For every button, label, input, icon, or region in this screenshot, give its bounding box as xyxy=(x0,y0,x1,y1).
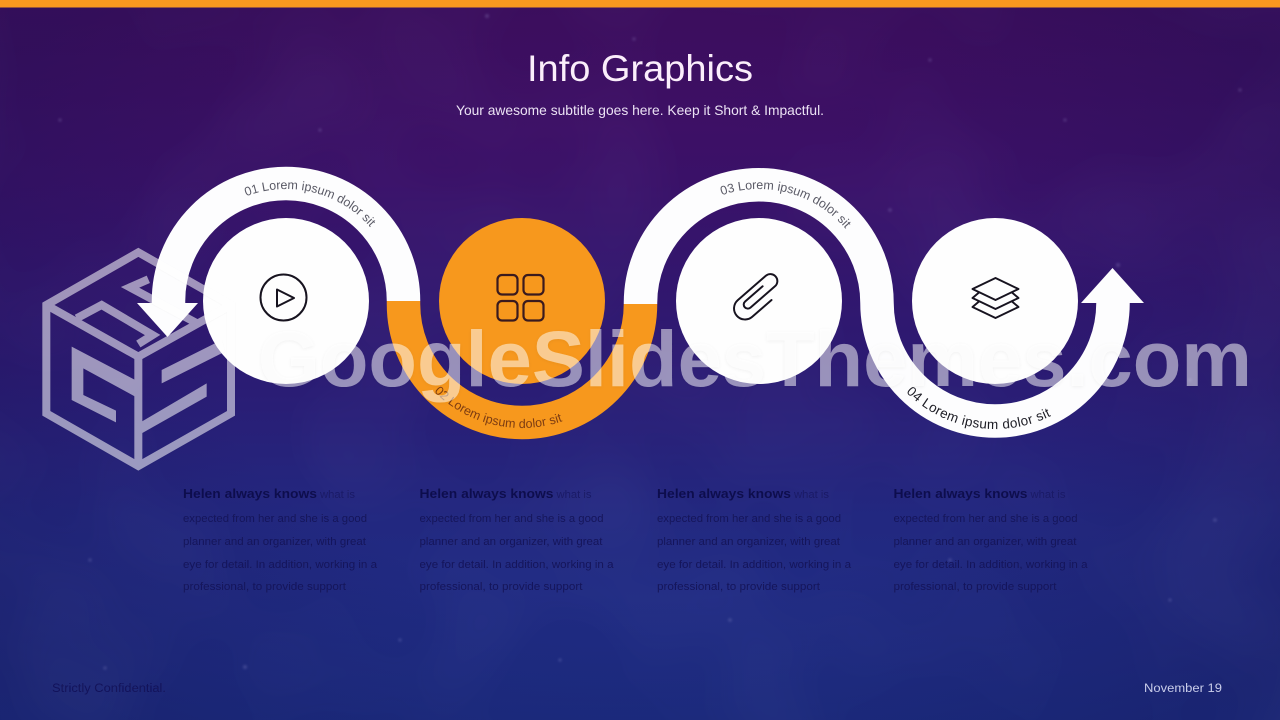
footer: confidentiality note: Strictly Confidential. xyxy=(52,683,166,695)
text block 3: professional, to provide support xyxy=(657,581,820,593)
text block 4 xyxy=(894,487,1088,593)
text block 2: eye for detail. In addition, working in a xyxy=(420,559,614,571)
footer: date: November 19 xyxy=(1144,683,1222,695)
text block 3: eye for detail. In addition, working in a xyxy=(657,559,852,571)
icon: play xyxy=(260,274,306,320)
subtitle: Your awesome subtitle goes here. Keep it Short & Impactful. xyxy=(456,102,824,118)
text block 2 xyxy=(420,487,614,593)
title: Info Graphics xyxy=(527,48,753,89)
label 04: 04 Lorem ipsum dolor sit xyxy=(908,387,1051,430)
text block 4: planner and an organizer, with great xyxy=(894,536,1076,548)
text block 4: expected from her and she is a good xyxy=(894,513,1078,525)
watermark text: GoogleSlidesThemes.com xyxy=(258,314,1252,403)
arrow segment 01: white ribbon with arrowhead xyxy=(137,166,420,337)
icon: paperclip xyxy=(729,271,786,324)
arrow segments 03 and 04: white S ribbon with arrowhead xyxy=(624,168,1144,438)
step 1 circle with play icon xyxy=(203,218,369,384)
arrow segment 02: orange ribbon xyxy=(386,301,658,440)
text block 4: Helen always knows xyxy=(894,487,1028,501)
text block 3: planner and an organizer, with great xyxy=(657,536,840,548)
text block 1 xyxy=(183,487,378,593)
step 4 circle with layers icon xyxy=(912,218,1078,384)
text block 2: planner and an organizer, with great xyxy=(420,536,602,548)
text block 1: what is xyxy=(319,489,355,501)
text block 4: what is xyxy=(1029,489,1066,501)
text block 3 xyxy=(657,487,852,593)
text block 4: eye for detail. In addition, working in a xyxy=(894,559,1088,571)
watermark logo: cube xyxy=(46,252,231,466)
text block 2: Helen always knows xyxy=(420,487,554,501)
text block 1: Helen always knows xyxy=(183,487,317,501)
text block 1: professional, to provide support xyxy=(183,581,346,593)
text block 2: what is xyxy=(555,489,592,501)
label 03: 03 Lorem ipsum dolor sit xyxy=(720,182,851,229)
text block 3: Helen always knows xyxy=(657,487,791,501)
text block 1: planner and an organizer, with great xyxy=(183,536,366,548)
label 01: 01 Lorem ipsum dolor sit xyxy=(244,181,376,228)
top accent bar xyxy=(0,0,1280,8)
text block 3: expected from her and she is a good xyxy=(657,513,841,525)
step 2 circle with grid icon xyxy=(439,218,605,384)
icon: grid xyxy=(498,275,544,320)
text block 4: professional, to provide support xyxy=(894,581,1056,593)
text block 2: professional, to provide support xyxy=(420,581,582,593)
label 02: 02 Lorem ipsum dolor sit xyxy=(436,386,562,428)
icon: layers xyxy=(972,278,1018,318)
text block 1: expected from her and she is a good xyxy=(183,513,367,525)
text block 3: what is xyxy=(793,489,829,501)
step 3 circle with paperclip icon xyxy=(676,218,842,384)
text block 1: eye for detail. In addition, working in a xyxy=(183,559,378,571)
text block 2: expected from her and she is a good xyxy=(420,513,604,525)
